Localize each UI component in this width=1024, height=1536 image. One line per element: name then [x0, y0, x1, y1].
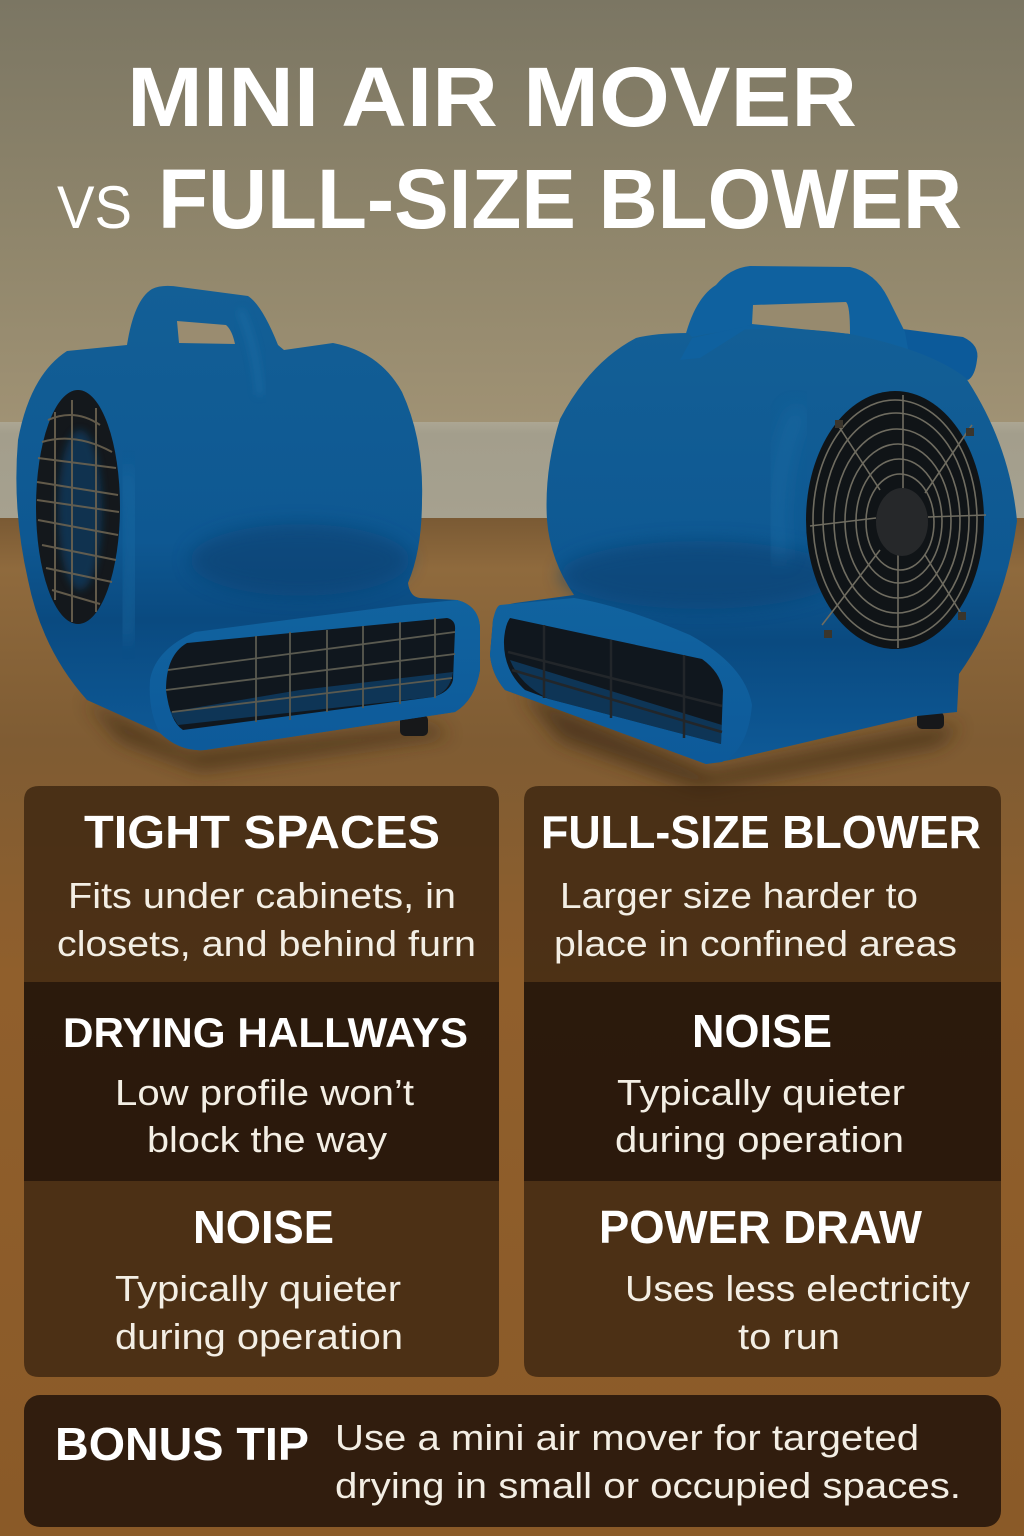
panel: noise, full-size: during operation [615, 1119, 904, 1160]
carrying knob [890, 328, 977, 380]
panel: power draw: POWER DRAW [599, 1201, 923, 1253]
title: MINI AIR MOVER [127, 50, 857, 144]
title: VS [57, 174, 132, 241]
panel: noise, full-size: NOISE [692, 1005, 832, 1057]
panel: tight spaces: TIGHT SPACES [84, 806, 440, 858]
panel: tight spaces: closets, and behind furn [57, 923, 476, 964]
bonus tip text [335, 1417, 961, 1506]
blower photo: mini air mover [16, 286, 480, 770]
panel: power draw [524, 1181, 1001, 1377]
panel: tight spaces [24, 786, 499, 982]
panel: noise, mini: during operation [115, 1316, 403, 1357]
bonus tip heading: BONUS TIP [55, 1418, 309, 1470]
bonus tip text: Use a mini air mover for targeted [335, 1417, 919, 1458]
bonus tip text: drying in small or occupied spaces. [335, 1465, 961, 1506]
panel: right column [524, 786, 1001, 1377]
panel: noise, mini: Typically quieter [115, 1268, 401, 1309]
panel: power draw: Uses less electricity [625, 1268, 970, 1309]
panel: power draw: to run [738, 1316, 840, 1357]
panel: drying hallways: DRYING HALLWAYS [63, 1009, 468, 1056]
panel: noise, full-size [524, 982, 1001, 1181]
panel: drying hallways: Low profile won’t [115, 1072, 414, 1113]
fan grille [806, 391, 986, 649]
intake grille [36, 390, 120, 624]
panel: noise, mini: NOISE [193, 1201, 334, 1253]
panel: full-size blower: FULL-SIZE BLOWER [541, 806, 981, 858]
panel: full-size blower [524, 786, 1001, 982]
panel: drying hallways [24, 982, 499, 1181]
panel: drying hallways: block the way [147, 1119, 387, 1160]
panel: full-size blower: place in confined areas [554, 923, 957, 964]
outlet grille [504, 618, 723, 744]
blower photo: full-size blower [490, 266, 1017, 790]
panel: noise, full-size: Typically quieter [617, 1072, 905, 1113]
panel: left column [24, 786, 499, 1377]
title: FULL-SIZE BLOWER [158, 152, 962, 246]
panel: full-size blower: Larger size harder to [560, 875, 918, 916]
outlet grille [166, 618, 455, 730]
panel: bonus tip [24, 1395, 1001, 1527]
title [57, 50, 962, 246]
panel: tight spaces: Fits under cabinets, in [68, 875, 456, 916]
panel: noise, mini [24, 1181, 499, 1377]
